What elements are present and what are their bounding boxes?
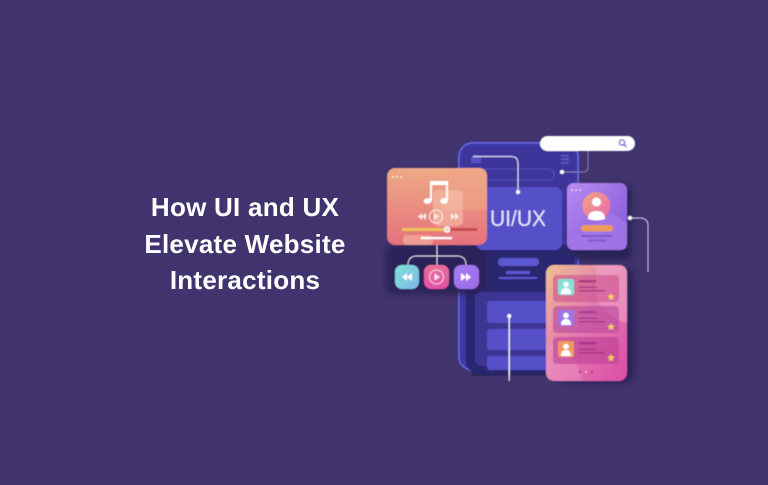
button: fast forward (454, 265, 479, 289)
search bar (540, 136, 635, 151)
title: Elevate Website (144, 228, 346, 258)
connector: lower panel (507, 314, 511, 381)
list row 2 (553, 306, 619, 333)
shadows behind cards (386, 186, 634, 383)
title: Interactions (170, 265, 320, 295)
title: How UI and UX (151, 192, 339, 222)
button: play (424, 265, 449, 289)
music note icon (424, 181, 448, 204)
text lines under panel (498, 258, 539, 279)
music player card (387, 168, 487, 245)
phone header (471, 154, 569, 180)
connector: search bar (560, 151, 588, 174)
lower content panel (475, 292, 557, 370)
list card (546, 265, 627, 381)
UI/UX panel: UI/UX (490, 206, 546, 231)
list row 1 (553, 275, 619, 302)
connector: header to UI/UX panel (473, 156, 520, 194)
list row 3 (553, 337, 619, 364)
connector: music card to buttons (408, 245, 466, 265)
playback controls (418, 210, 459, 223)
progress bar (402, 227, 477, 232)
pagination dots (579, 371, 593, 373)
connector: profile card (628, 216, 648, 272)
avatar (582, 192, 610, 220)
window dots (392, 176, 402, 178)
window dots (571, 189, 581, 191)
profile card (567, 183, 627, 250)
title (144, 192, 346, 295)
button: rewind (395, 265, 419, 289)
UI/UX panel (476, 187, 562, 250)
phone body (458, 142, 579, 376)
